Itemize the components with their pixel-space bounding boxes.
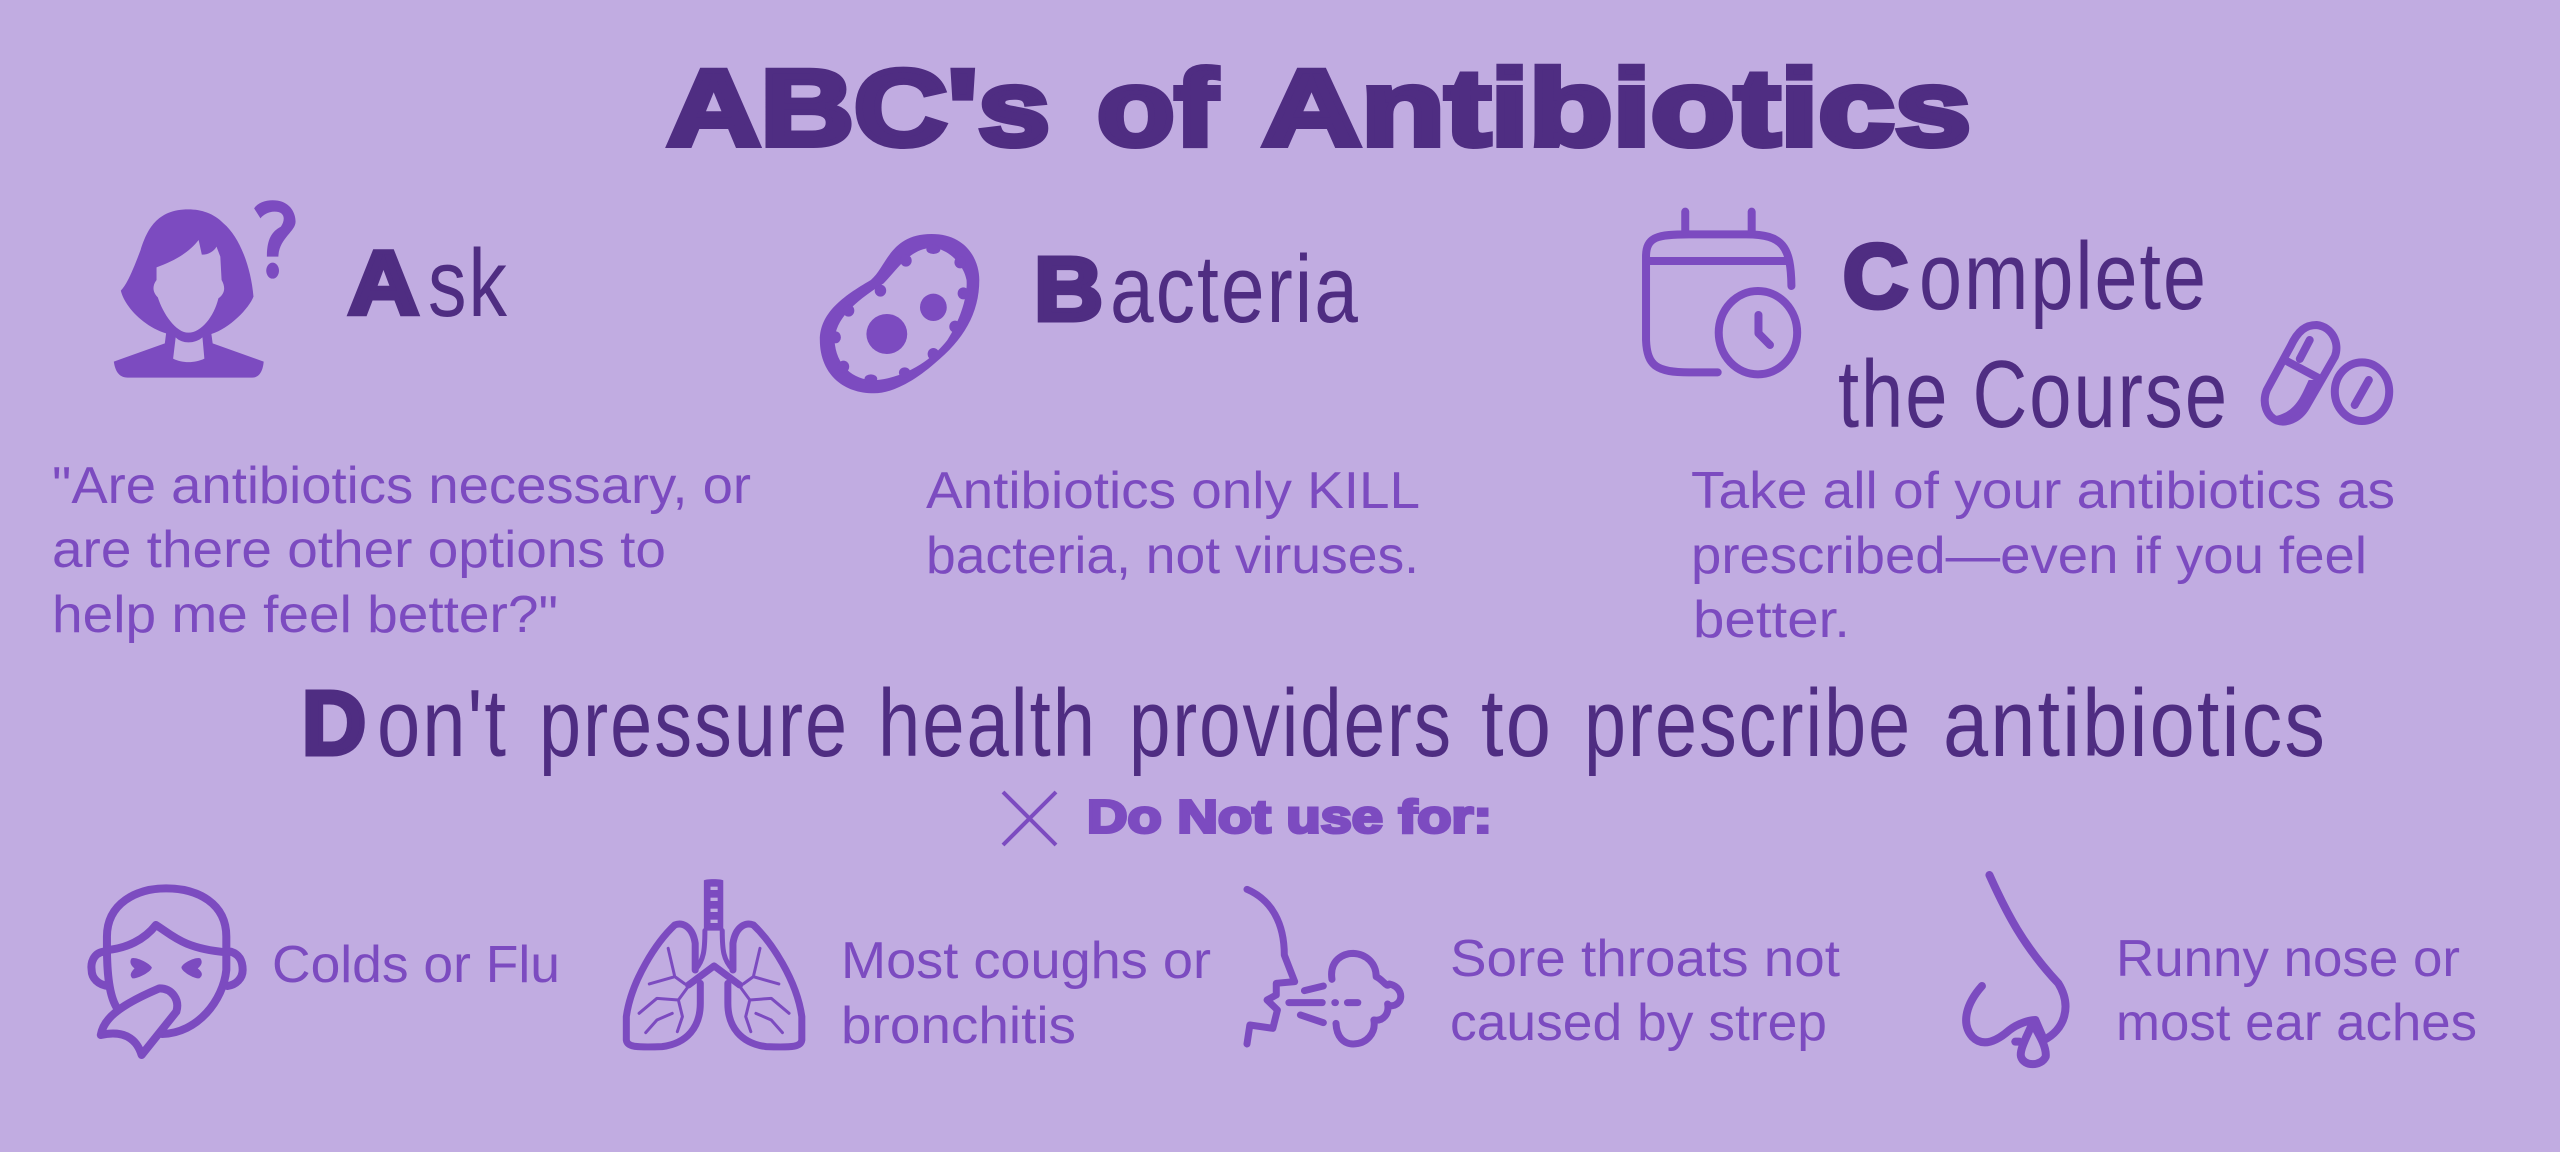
heading: ask: A: [348, 234, 419, 334]
heading: complete the course: the Course: [1838, 341, 2229, 448]
heading: don't pressure: on't: [377, 670, 508, 777]
heading: don't pressure: providers: [1129, 670, 1453, 777]
item: sore throats: [1247, 889, 1841, 1052]
heading: don't pressure: pressure: [539, 670, 849, 777]
title: of: [1097, 47, 1218, 168]
label: do not use for: Do Not use for:: [1087, 790, 1492, 842]
label: colds or flu: Colds or Flu: [272, 936, 560, 994]
heading: complete the course: [1838, 223, 2229, 448]
heading: don't pressure: D: [302, 674, 366, 774]
icon: sick face: [91, 888, 243, 1055]
item: runny nose: [1966, 875, 2477, 1064]
text: bacteria: bacteria, not viruses.: [926, 527, 1419, 585]
panel: ask: [52, 200, 751, 644]
panel: complete the course: [1646, 212, 2395, 649]
text: ask: are there other options to: [52, 521, 666, 579]
label: sore throats: [1450, 930, 1841, 1052]
title: [667, 47, 1971, 168]
text: complete the course: better.: [1693, 591, 1850, 649]
subheading: do not use for: [1003, 790, 1492, 845]
text: bacteria: [926, 462, 1420, 585]
text: bacteria: Antibiotics only KILL: [926, 462, 1420, 520]
label: runny nose: Runny nose or: [2116, 930, 2460, 988]
icon: runny nose: [1966, 875, 2065, 1064]
icon: pills: [2265, 325, 2389, 422]
label: sore throats: Sore throats not: [1450, 930, 1841, 988]
icon: person with question mark: [114, 200, 296, 378]
icon: lungs: [626, 879, 802, 1047]
text: ask: [52, 457, 751, 644]
label: coughs: bronchitis: [841, 997, 1076, 1055]
label: coughs: [841, 932, 1211, 1055]
label: runny nose: [2116, 930, 2477, 1052]
text: complete the course: Take all of your antibiotics as: [1691, 462, 2395, 520]
heading: don't pressure: [302, 670, 2327, 777]
heading: ask: sk: [428, 230, 509, 337]
label: sore throats: caused by strep: [1450, 994, 1827, 1052]
icon: coughing profile: [1247, 889, 1401, 1044]
panel: bacteria: [820, 234, 1420, 585]
title: Antibiotics: [1262, 47, 1971, 168]
item: coughs: [626, 879, 1211, 1055]
text: complete the course: prescribed—even if you feel: [1691, 527, 2367, 585]
heading: complete the course: C: [1843, 227, 1908, 327]
icon: x mark: [1003, 792, 1056, 845]
heading: bacteria: [1034, 236, 1360, 343]
item: colds or flu: [91, 888, 560, 1055]
heading: complete the course: omplete: [1919, 223, 2208, 330]
icon: bacterium: [820, 234, 979, 393]
text: complete the course: [1691, 462, 2395, 649]
heading: don't pressure: antibiotics: [1943, 670, 2327, 777]
text: ask: "Are antibiotics necessary, or: [52, 457, 751, 515]
text: ask: help me feel better?": [52, 586, 558, 644]
heading: don't pressure: prescribe: [1584, 670, 1912, 777]
heading: don't pressure: health: [878, 670, 1097, 777]
heading: bacteria: B: [1034, 240, 1103, 340]
icon: calendar with clock: [1646, 212, 1797, 374]
title: ABC's: [667, 47, 1050, 168]
label: coughs: Most coughs or: [841, 932, 1211, 990]
heading: ask: [348, 230, 509, 337]
label: runny nose: most ear aches: [2116, 994, 2477, 1052]
heading: don't pressure: to: [1481, 670, 1553, 777]
heading: bacteria: acteria: [1110, 236, 1360, 343]
